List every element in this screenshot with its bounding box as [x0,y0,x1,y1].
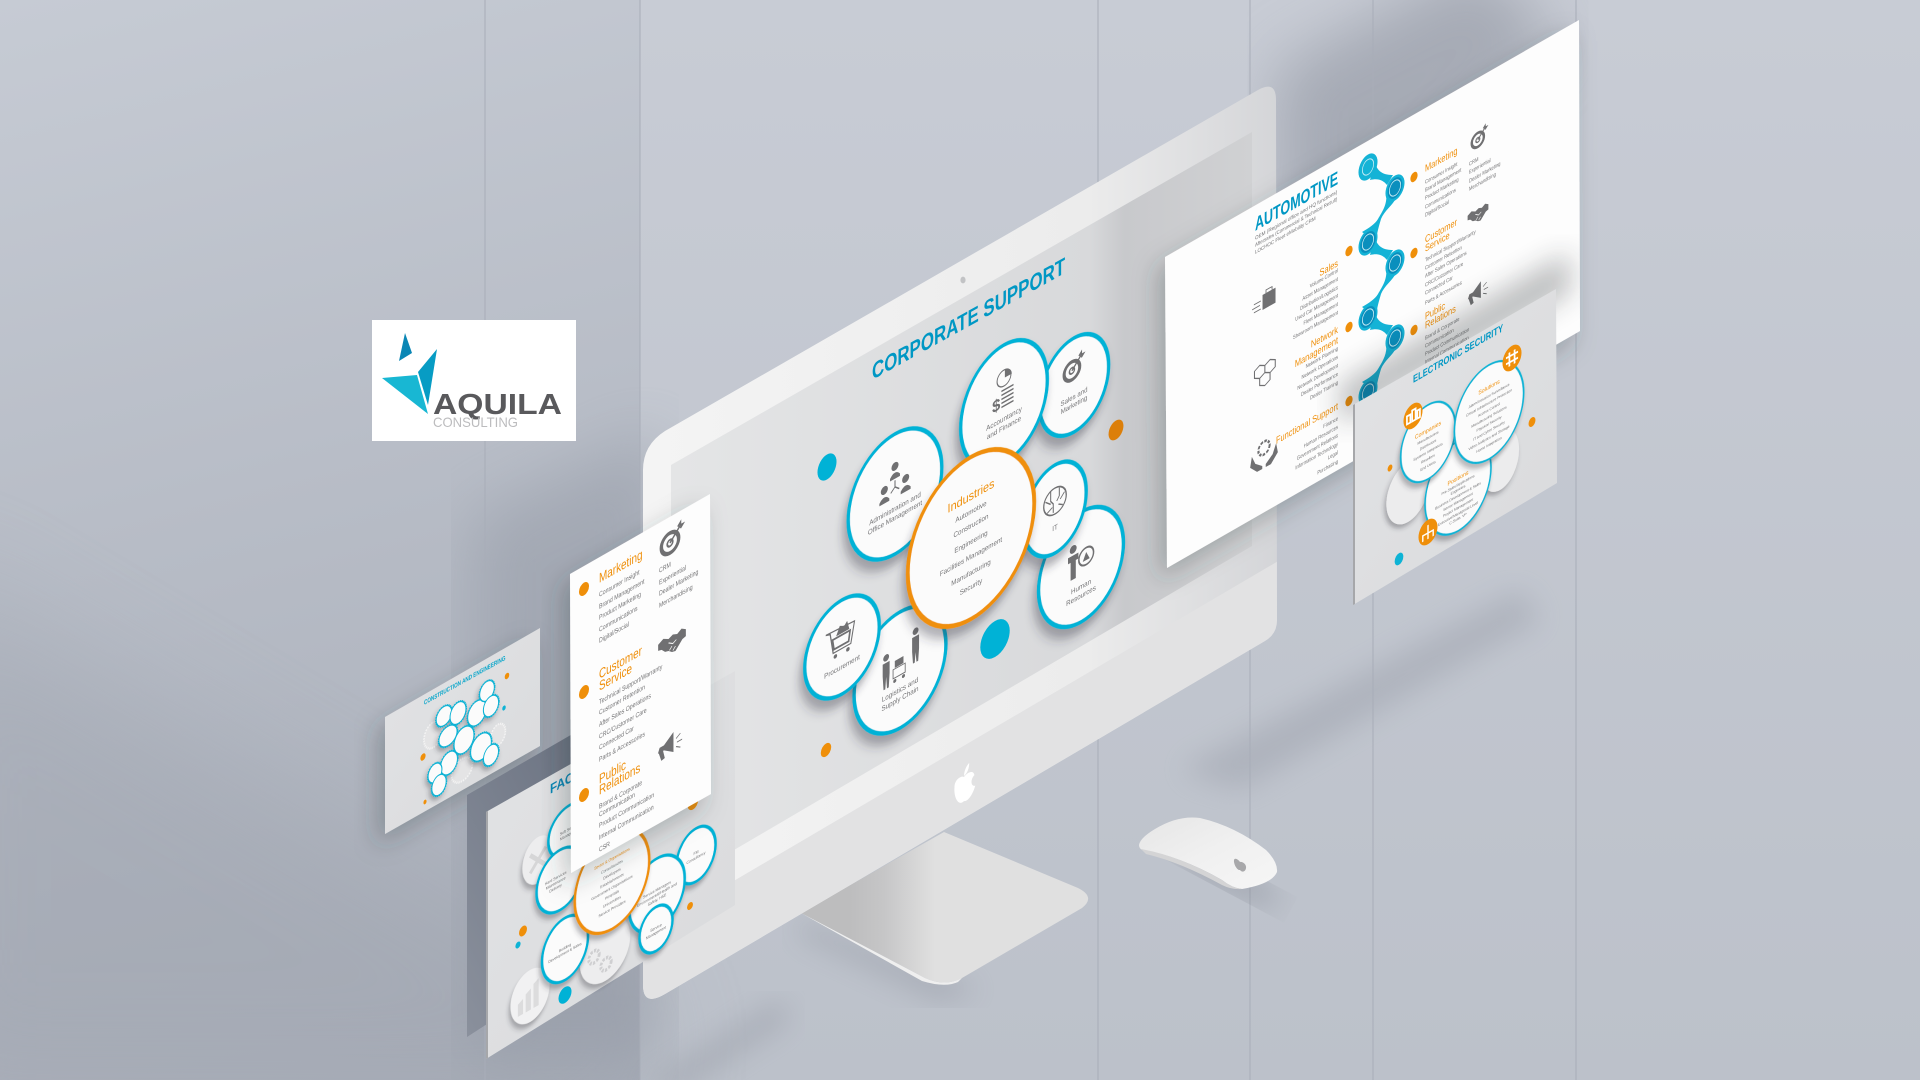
left column: sales: Fleet Management [1304,301,1338,327]
circle: service managers: Environmental/Health and [637,881,677,908]
monitor stand foot [800,832,1088,1000]
right column: customer service: Customer Retention [1425,245,1462,272]
right column: customer service: Service [1425,229,1450,254]
snake timeline [1358,149,1405,410]
left column: functional support [1276,400,1338,500]
left column: sales [1293,257,1338,342]
monitor screen [671,132,1252,887]
circle: IT [1024,447,1086,571]
circle: companies [1401,390,1455,494]
circle: positions: Engineers [1451,484,1465,496]
circle: solutions: Access Control [1478,402,1500,418]
sheet: customer service list: After Sales Operations [599,692,652,729]
backing panel behind facilities [467,695,640,1037]
right column: marketing second list: Experiential [1469,157,1491,176]
left column: functional support: Legal [1328,450,1338,462]
circle: industries: Automotive [955,499,987,525]
left column: functional support: Finance [1323,416,1338,431]
sheet: public relations list: Communication [599,791,635,819]
timeline dots [1345,170,1418,408]
automotive heading: AUTOMOTIVE [1255,168,1338,236]
circle: companies: End Users [1420,460,1436,472]
circle: sector organisations: Service Providers [598,898,626,919]
panel: electronic security [1353,289,1557,605]
circle: positions: Senior Management [1443,491,1474,512]
circle: soft services: Soft Services [560,820,580,837]
left column: functional support: Information Technology [1295,441,1338,472]
circle: industries [908,421,1034,655]
circle: service managers: Service Managers [643,879,671,900]
left column: sales: Asset Management [1302,276,1338,303]
automotive heading: LOCHOC Fleet eMobility CRM [1255,216,1316,256]
icon: sheet megaphone [658,727,682,763]
circle: accountancy and finance: $ [992,394,1001,418]
circle: positions: C-Suite, VP [1449,512,1467,526]
sheet: marketing second list: Dealer Marketing [659,568,699,598]
sheet: public relations list: Relations [599,760,640,798]
left column: network management [1295,324,1338,411]
logo: Aquila Consulting: AQUILA [433,389,562,421]
right column: marketing: Marketing [1425,145,1457,174]
electronic dots [1388,415,1535,567]
sheet: marketing list [599,545,645,645]
circle: IT: IT [1052,522,1058,534]
right column: marketing: Communications [1425,187,1456,211]
screen: corporate support [805,252,1123,759]
construction title: CONSTRUCTION AND ENGINEERING [424,655,505,707]
right column: marketing second list [1469,144,1501,193]
icon: sheet target [661,521,683,558]
monitor chin [640,560,1280,1020]
sheet: public relations list: Product Communication [599,791,654,830]
sheet: customer service list: Parts & Accessories [599,730,646,764]
circle: human resources: Human [1071,577,1091,597]
circle: procurement [805,579,879,715]
icon: sheet handshake [658,626,686,661]
sheet: customer service list: Connected Car [599,725,634,752]
icon: gear in hands [1250,434,1278,476]
circle: solutions: Critical Infrastructure Protection [1466,388,1512,418]
circle: building development [542,905,588,993]
circle: service management [640,898,672,960]
apple logo on chin [954,760,975,807]
grey gear circles [424,717,505,787]
left column: network management: Management [1295,334,1338,370]
circle: industries: Industries [948,476,994,516]
circle: industries: Manufacturing [951,558,991,588]
circle: positions: Pre-Sales/Applications [1441,474,1475,496]
badge icons [1407,348,1518,542]
circle: solutions: Video Analytics and Storage [1468,424,1510,452]
circle: positions: Executive/Managerial Level [1438,501,1478,527]
circle: solutions: Alarm/Intrusion Surveillance [1469,382,1509,410]
circle: building development: Building [559,942,571,953]
right column: customer service: CRC/Customer Care [1425,261,1463,289]
grey background circles [1386,419,1519,534]
left column: network management: Network Planning [1306,346,1338,371]
circle: sector organisations: Establishments [600,871,624,890]
monitor [640,87,1280,1020]
icon: megaphone [1468,277,1488,307]
right column: customer service [1425,205,1476,307]
left column: sales: Used Car Management [1295,292,1338,323]
circle: companies: Resellers [1421,453,1435,465]
icon: network hexagons [1254,357,1275,391]
circle: service managers [629,843,685,945]
circle: sector organisations: Sector & Organisations [594,846,630,871]
right column: customer service: Connected Car [1425,275,1453,297]
sheet: marketing second list [659,545,699,610]
sheet: public relations list: Public [599,757,626,787]
left column: functional support: Human Resources [1304,424,1338,450]
left column: network management: Network Operations [1301,354,1338,381]
circle: companies: Distributors [1420,438,1436,452]
circle: positions: Positions [1447,470,1469,488]
right column: marketing second list: Merchandising [1469,171,1496,193]
sheet: customer service list: Customer Retention [599,683,645,717]
circle: industries: Engineering [954,529,988,555]
left column: sales: Sales [1320,257,1338,279]
sheet: public relations list [599,741,654,854]
sheet: marketing list: Digital/Social [599,621,629,645]
circle: sales and marketing: Marketing [1061,394,1087,417]
circle: HM consultancy: Consultancy [686,850,706,865]
circle: positions: Business Development & Sales [1435,481,1481,511]
sheet: customer service list: Service [599,660,632,694]
webcam [960,277,966,283]
circle: logistics and supply chain: Logistics and [882,676,918,704]
circle: soft services [548,793,592,867]
sheet: marketing list: Consumer Insight [599,569,640,599]
circle: administration and office management [848,408,942,580]
circle: HM consultancy: FM [693,849,699,856]
title: corporate support: CORPORATE SUPPORT [872,252,1065,385]
monitor body frame [643,87,1277,999]
panel: construction and engineering [385,628,540,834]
right column: marketing: Product Marketing [1425,177,1459,202]
circle: service managers: Safety, HSE [648,892,667,907]
right column: public relations: Communication [1425,327,1454,350]
sheet: marketing second list: Experiential [659,564,686,587]
circle: sector organisations: Hospitals [605,888,619,901]
logo: Aquila Consulting [372,320,576,441]
electronic security title: ELECTRONIC SECURITY [1413,323,1503,386]
circle: human resources [1039,488,1123,646]
sheet: public relations list: CSR [599,840,610,854]
circle: companies: Manufacturers [1418,430,1439,446]
right column: customer service: Parts & Accessories [1425,280,1462,307]
right column: customer service: Customer [1425,216,1457,245]
circle: sector organisations [575,812,649,950]
circle: industries: Facilities Management [940,535,1002,579]
circle: accountancy and finance: Accountancy [986,405,1022,433]
left column: network management: Dealer Performance [1301,371,1338,399]
circle: HM consultancy [677,817,715,893]
panel: facilities management [486,671,735,1059]
facilities dots [515,794,698,1007]
left column: sales: Showroom Management [1293,309,1338,342]
circle: logistics and supply chain [854,586,946,754]
circle: hard services [537,837,583,923]
circle: companies: Companies [1415,421,1441,441]
circle: solutions: Physical Security [1476,415,1502,433]
right column: public relations: Public [1425,300,1445,322]
right column: marketing second list: CRM [1469,156,1478,168]
right column: public relations: Relations [1425,303,1456,331]
right column: customer service: After Sales Operations [1425,250,1467,280]
circle: logistics and supply chain: Supply Chain [881,685,919,713]
right column: customer service: Technical Support/Warranty [1425,229,1476,264]
circle: sector organisations: Developers [603,866,621,881]
automotive heading: Aftersales (Commercial & Technical Result) [1255,196,1337,249]
right column: marketing second list: Dealer Marketing [1469,161,1501,185]
circle: sector organisations: Universities [603,894,621,909]
circle: solutions [1454,345,1524,479]
circle: hard services: Maintenance [546,874,566,891]
circle: administration and office management: Office Management [868,499,922,537]
left column: functional support: Purchasing [1317,459,1338,477]
left column: network management: Network Development [1297,362,1338,392]
right column: marketing: Digital/Social [1425,199,1449,219]
left column: sales: Volume Control [1310,268,1338,290]
circle: sector organisations: Government Organisations [591,873,633,902]
circle: service management: Service [650,921,662,933]
sheet: marketing list: Communications [599,604,638,634]
circle: hard services: Hard Services [545,869,567,887]
circle: positions [1425,422,1491,550]
construction dots [420,672,509,805]
circle: human resources: Resources [1066,583,1096,608]
circle: administration and office management: Administration and [869,490,921,528]
circle: accountancy and finance [961,320,1047,488]
icon: marketing target [1472,124,1487,150]
right column: marketing [1425,143,1462,219]
sheet: marketing list: Marketing [599,546,643,586]
circle: procurement: Procurement [824,653,860,681]
mouse [1139,817,1285,915]
sheet: public relations list: Brand & Corporate [599,779,642,811]
sheet: customer service list [599,631,663,764]
facilities title: FACILITIES MANAGEMENT [550,696,702,797]
logo: Aquila Consulting: CONSULTING [433,414,518,430]
circle: positions: Project Management [1443,497,1474,519]
grey background circles with icons [511,828,630,1033]
circle: industries: Security [960,576,983,597]
circle: sector organisations: Consultancies [601,858,623,875]
circle: accountancy and finance: and Finance [987,414,1021,442]
electronic panel cast shadow [1340,252,1570,425]
panel: automotive [1165,20,1580,568]
badges [1403,340,1522,550]
circle: building development: Development & Sales [548,941,582,964]
icon: handshake [1468,202,1488,228]
left column: sales: Distribution/Logistics [1300,285,1338,313]
circle: solutions: IT and Cyber Security [1473,420,1505,442]
sheet: marketing list: Brand Management [599,578,645,611]
automotive heading [1255,168,1338,256]
circle: hard services: Delivery [549,882,562,894]
circle: sales and marketing: Sales and [1061,386,1088,409]
left column: network management: Dealer Training [1310,380,1338,402]
automotive heading: OEM (Regional office and HQ functions) [1255,189,1337,242]
left column: network management: Network [1311,324,1338,350]
panel: marketing foreground sheet [570,494,711,873]
circle: companies: Systems Integrators [1413,442,1443,462]
right column: marketing: Brand Management [1425,167,1462,194]
circle: industries: Construction [954,512,988,540]
right column: public relations: Brand & Corporate [1425,316,1460,342]
left column: functional support: Functional Support [1276,400,1338,446]
circle: solutions: Solutions [1478,379,1500,397]
right column: public relations [1425,286,1469,366]
left column: functional support: Government Relations [1297,433,1338,463]
sheet dots [579,580,589,804]
right column: public relations: Product Communication [1425,327,1469,358]
circle: service management: Management [646,924,667,941]
right column: public relations: Internal Communication [1425,335,1469,366]
circle: sales and marketing [1039,318,1109,452]
sheet: public relations list: Internal Communication [599,803,654,842]
cyan gear circles [428,677,499,799]
right column: marketing: Consumer Insight [1425,161,1458,186]
circle: solutions: Manufacturing Solutions [1471,405,1507,429]
sheet: marketing second list: CRM [659,561,671,575]
sheet: customer service list: Technical Support/Warranty [599,663,663,707]
sheet: marketing second list: Merchandising [659,583,693,610]
sheet: customer service list: Customer [599,643,642,682]
circle: soft services: Management [560,825,581,842]
icon: sales bag [1252,285,1276,316]
circle: solutions: Home Integration [1476,436,1502,454]
sheet: marketing list: Product Marketing [599,591,641,622]
decorative dots [817,416,1123,759]
sheet: customer service list: CRC/Customer Care [599,706,647,741]
